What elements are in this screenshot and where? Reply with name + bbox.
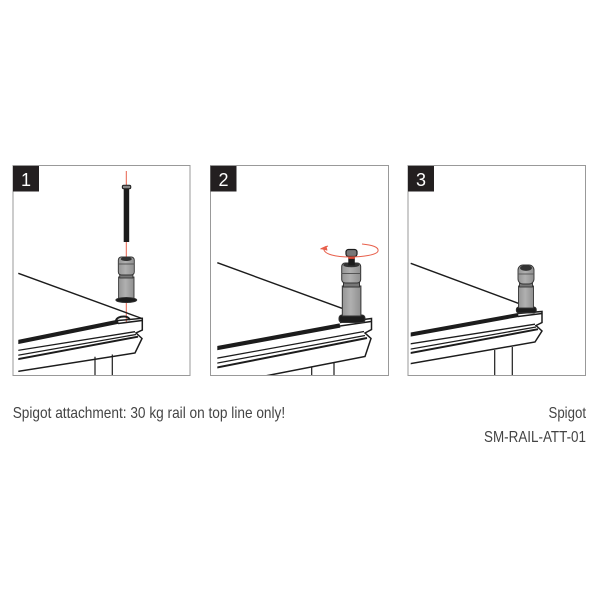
rotation arrow: [320, 244, 378, 257]
step badge 1: 1: [21, 170, 31, 190]
rail profile: [400, 312, 542, 375]
spigot: [116, 257, 137, 303]
step badge 1: [13, 166, 39, 192]
panel: step 3: [400, 166, 586, 376]
rail profile: [8, 316, 142, 375]
product name: Spigot: [548, 405, 586, 422]
spigot: [516, 265, 536, 313]
panel frame 1: [13, 166, 190, 376]
screw: [122, 185, 131, 242]
panel: step 2: [207, 166, 388, 376]
table edge line: [18, 273, 142, 318]
panel: step 1: [8, 166, 190, 376]
rail profile: [207, 318, 372, 376]
step badge 2: 2: [218, 170, 229, 190]
step badge 2: [210, 166, 236, 192]
panel frame 3: [408, 166, 586, 376]
caption: attachment note: Spigot attachment: 30 kg rail on top line only!: [13, 405, 285, 422]
table edge line: [411, 263, 518, 303]
panel frame 2: [210, 166, 388, 376]
step badge 3: [408, 166, 434, 192]
red alignment line: [125, 171, 127, 322]
spigot: [339, 263, 365, 322]
screw head: [346, 250, 357, 266]
table edge line: [217, 263, 342, 308]
step badge 3: 3: [416, 170, 426, 190]
